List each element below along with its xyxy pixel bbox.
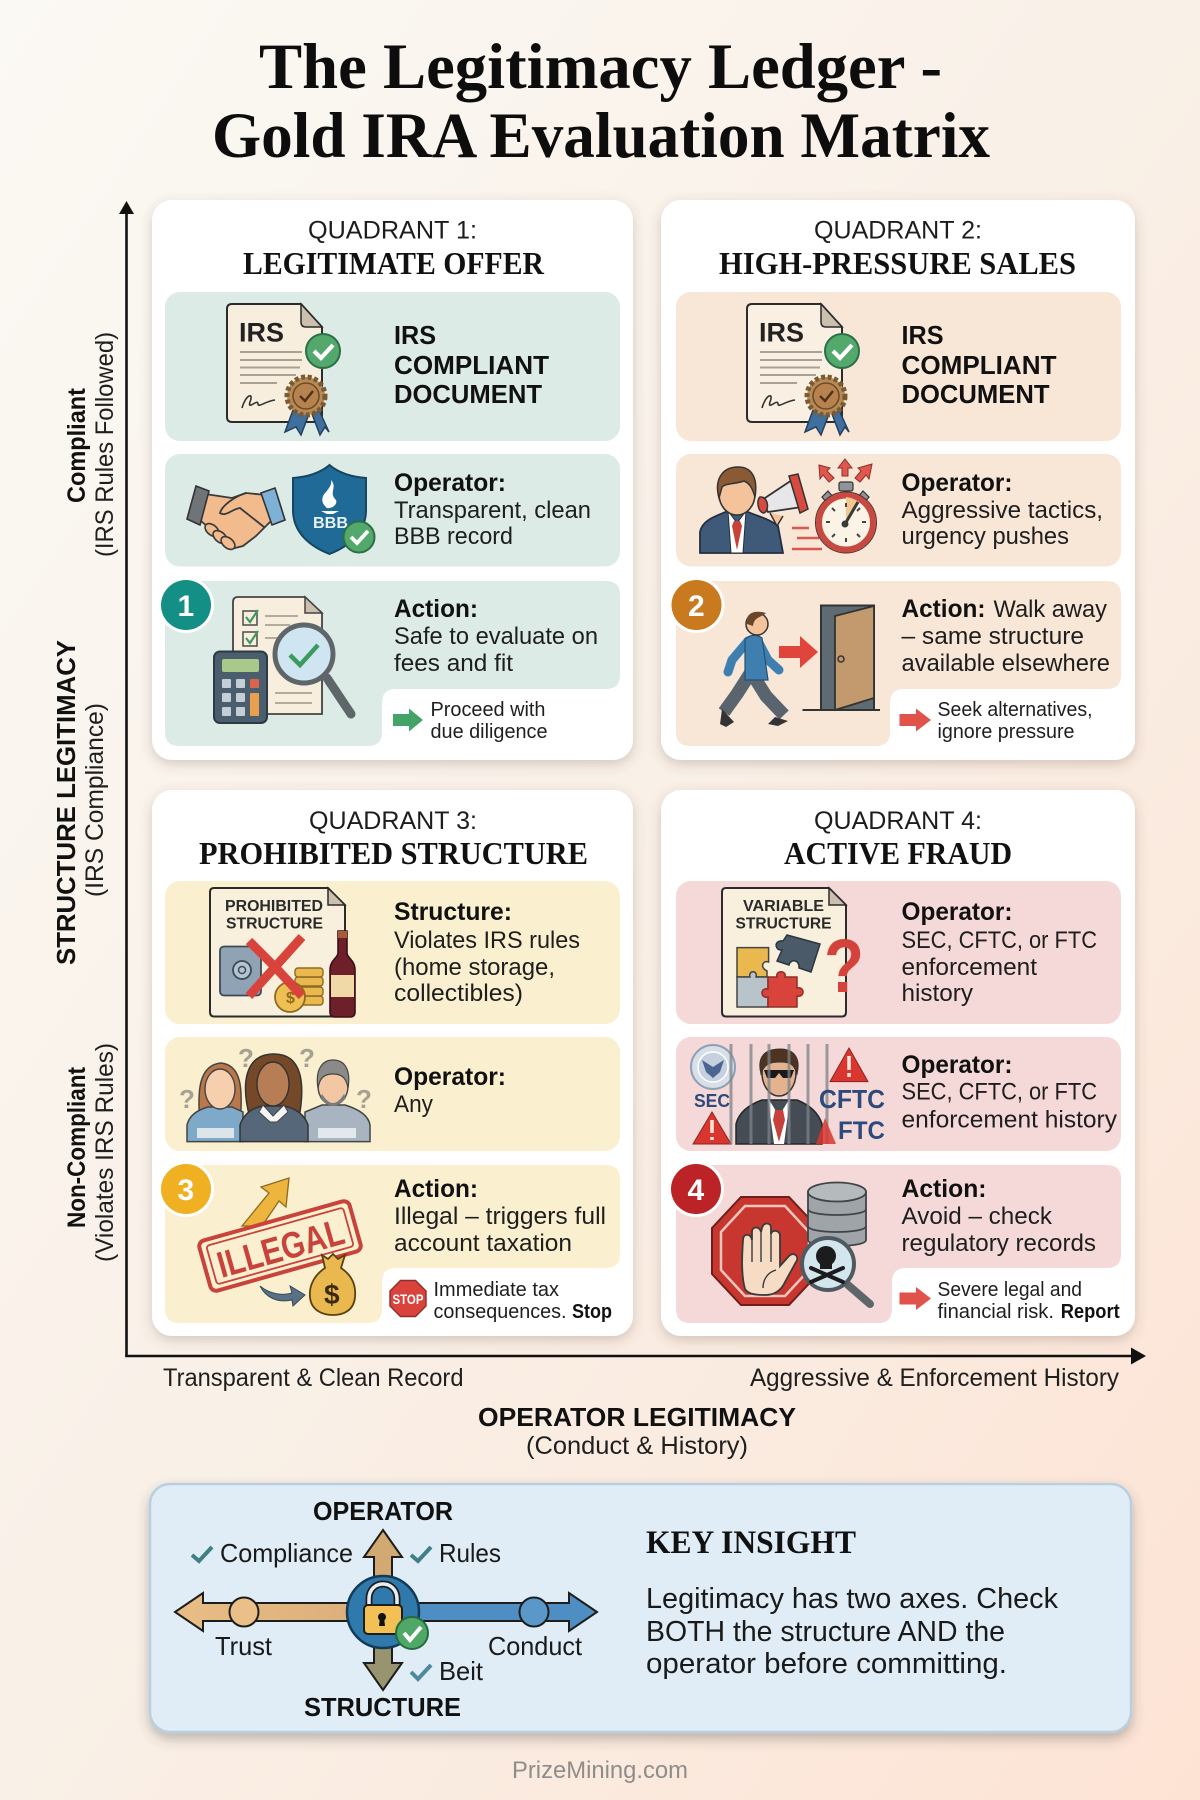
badge: 2: 2 <box>688 590 705 623</box>
left arrow <box>175 1593 350 1631</box>
icon: green arrow <box>393 708 423 732</box>
icon: prohibited structure document <box>210 888 355 1017</box>
action text <box>902 595 1110 677</box>
operator text: SEC, CFTC, or FTC <box>902 927 1097 954</box>
icon: illegal stamp, rising arrow and money bag: $ <box>324 1279 340 1310</box>
action text: – same structure <box>902 623 1084 650</box>
badge: 3 <box>158 1161 214 1217</box>
callout: severe legal and financial risk: Severe legal and <box>938 1279 1082 1301</box>
icon: warning triangle left <box>693 1112 731 1144</box>
operator text <box>394 1063 506 1118</box>
icon: stop sign <box>390 1280 426 1316</box>
operator text <box>394 469 591 550</box>
label: rules <box>411 1538 501 1568</box>
action text: Avoid – check <box>902 1203 1053 1230</box>
panel: quadrant 3 prohibited structure <box>152 790 633 1336</box>
row: action <box>676 1165 1121 1323</box>
action text: Illegal – triggers full <box>394 1203 606 1230</box>
row: operator <box>676 454 1121 566</box>
label: conduct: Conduct <box>488 1631 583 1661</box>
label: irs compliant document: IRS <box>902 320 944 350</box>
vertical axis arrow: structure legitimacy <box>119 201 134 1356</box>
operator text: history <box>902 980 973 1007</box>
icon: variable structure puzzle document: ? <box>824 924 864 1009</box>
y axis label: non-compliant: (Violates IRS Rules) <box>91 1043 119 1262</box>
icon: checklist, calculator and magnifier <box>214 597 351 723</box>
diagram: two axes with lock <box>175 1496 597 1722</box>
operator label: OPERATOR <box>313 1496 453 1526</box>
callout: proceed with due diligence: due diligence <box>430 721 548 743</box>
icon: three people with question marks: ? <box>238 1043 254 1073</box>
row: operator <box>165 454 620 566</box>
callout: seek alternatives <box>938 699 1092 743</box>
x axis endpoint labels <box>163 1364 1119 1392</box>
operator text: BBB record <box>394 523 513 550</box>
action text: Safe to evaluate on <box>394 623 598 650</box>
node: trust <box>230 1598 258 1626</box>
callout: immediate tax consequences: Stop <box>572 1301 612 1323</box>
y axis label: compliant: Compliant <box>63 387 91 503</box>
operator text <box>902 469 1103 550</box>
row: action <box>165 1165 620 1323</box>
icon: red arrow <box>900 1287 931 1310</box>
badge: 3: 3 <box>178 1174 194 1207</box>
action text: fees and fit <box>394 650 513 677</box>
icon: cftc and ftc labels: FTC <box>838 1117 885 1145</box>
key insight text: operator before committing. <box>646 1648 1007 1680</box>
icon: executive behind bars <box>731 1044 827 1144</box>
callout: immediate tax consequences: consequences. <box>434 1301 566 1323</box>
callout: immediate tax consequences: Immediate tax <box>434 1279 559 1301</box>
action text: regulatory records <box>902 1230 1096 1257</box>
icon: illegal stamp, rising arrow and money bag <box>198 1178 362 1315</box>
callout: severe legal and financial risk: Report <box>1061 1301 1120 1323</box>
structure text: Structure: <box>394 898 512 926</box>
icon: irs compliant document: IRS <box>239 318 284 348</box>
operator text: enforcement history <box>902 1106 1117 1134</box>
label: compliance: Compliance <box>220 1538 353 1568</box>
operator text: Operator: <box>394 469 506 497</box>
quadrant 3 heading <box>199 807 588 871</box>
icon: sec seal <box>691 1045 735 1111</box>
quadrant 3 heading: QUADRANT 3: <box>309 807 477 835</box>
action text: Action: <box>902 1175 986 1203</box>
quadrant 4 heading <box>784 807 1012 871</box>
structure text: collectibles) <box>394 980 523 1007</box>
icon: irs compliant document <box>227 304 340 435</box>
label: rules: Rules <box>439 1538 501 1568</box>
quadrant 1 heading: LEGITIMATE OFFER <box>243 245 545 281</box>
panel: quadrant 1 legitimate offer <box>152 200 633 760</box>
x axis title: operator legitimacy <box>478 1402 796 1460</box>
badge: 2 <box>668 577 724 633</box>
quadrant 3 heading: PROHIBITED STRUCTURE <box>199 835 588 871</box>
callout: severe legal and financial risk <box>938 1279 1120 1323</box>
icon: variable structure puzzle document: VARIABLE <box>743 898 824 915</box>
icon: check badge <box>396 1617 428 1649</box>
key insight text: Legitimacy has two axes. Check <box>646 1583 1058 1615</box>
row: action <box>676 581 1121 746</box>
icon: stopwatch with urgency arrows <box>792 459 876 553</box>
y axis label: non-compliant: Non-Compliant <box>63 1066 91 1228</box>
row: irs document <box>676 292 1121 441</box>
row: structure <box>676 881 1121 1024</box>
callout: proceed with due diligence: Proceed with <box>430 699 546 721</box>
badge: 1 <box>158 577 214 633</box>
badge: 4 <box>668 1161 724 1217</box>
down arrow <box>364 1640 402 1690</box>
icon: three people with question marks <box>179 1043 372 1142</box>
node: conduct <box>520 1598 548 1626</box>
row: operator <box>676 1037 1121 1151</box>
operator text: SEC, CFTC, or FTC <box>902 1078 1097 1106</box>
icon: bbb shield: BBB <box>313 515 348 532</box>
quadrant 2 heading: HIGH-PRESSURE SALES <box>719 245 1076 281</box>
label: beit: Beit <box>439 1656 484 1686</box>
quadrant 4 heading: ACTIVE FRAUD <box>784 835 1012 871</box>
icon: handshake <box>187 486 285 552</box>
operator text: Operator: <box>394 1063 506 1091</box>
row: irs document <box>165 292 620 441</box>
icon: prohibited structure document: $ <box>286 990 295 1007</box>
label: beit <box>411 1656 484 1686</box>
title: Gold IRA Evaluation Matrix <box>212 100 990 172</box>
quadrant 1 heading: QUADRANT 1: <box>308 216 477 244</box>
callout: proceed with due diligence <box>430 699 548 743</box>
structure text: (home storage, <box>394 954 555 981</box>
panel: key insight <box>150 1484 1131 1732</box>
structure text <box>394 898 580 1007</box>
action text: Walk away <box>994 596 1107 623</box>
action text: Action: <box>902 595 986 623</box>
action text: Action: <box>394 595 478 623</box>
label: irs compliant document: COMPLIANT <box>394 350 549 380</box>
operator text: urgency pushes <box>902 523 1069 550</box>
action text <box>902 1175 1096 1257</box>
icon: irs compliant document <box>747 304 859 435</box>
icon: variable structure puzzle document <box>722 888 864 1016</box>
icon: salesman with megaphone <box>700 467 808 553</box>
icon: prohibited structure document: PROHIBITED <box>225 898 323 915</box>
label: irs compliant document: IRS <box>394 320 436 350</box>
icon: warning triangle right <box>830 1048 868 1082</box>
icon: three people with question marks: ? <box>179 1084 195 1114</box>
icon: irs compliant document: IRS <box>759 318 804 348</box>
icon: three people with question marks: ? <box>356 1084 372 1114</box>
title <box>212 31 990 172</box>
action text: account taxation <box>394 1230 572 1257</box>
row: operator <box>165 1037 620 1151</box>
key insight heading: KEY INSIGHT <box>646 1525 856 1561</box>
label: irs compliant document: DOCUMENT <box>902 379 1050 409</box>
label: irs compliant document: COMPLIANT <box>902 350 1057 380</box>
operator text <box>902 898 1097 1007</box>
structure label: STRUCTURE <box>304 1692 461 1722</box>
quadrant 2 heading <box>719 216 1076 281</box>
horizontal axis arrow: operator legitimacy <box>125 1348 1146 1364</box>
quadrant 2 heading: QUADRANT 2: <box>814 216 982 244</box>
operator text: Any <box>394 1091 433 1118</box>
action text: available elsewhere <box>902 650 1110 677</box>
action text <box>394 595 598 677</box>
operator text <box>902 1051 1117 1134</box>
callout: severe legal and financial risk: financial risk. <box>938 1301 1054 1323</box>
x axis title: operator legitimacy: OPERATOR LEGITIMACY <box>478 1402 796 1432</box>
x axis title: operator legitimacy: (Conduct & History) <box>526 1432 748 1460</box>
icon: variable structure puzzle document: STRUCTURE <box>736 916 832 932</box>
panel: quadrant 4 active fraud <box>661 790 1135 1336</box>
icon: sec seal: SEC <box>694 1091 730 1111</box>
icon: bbb shield <box>293 465 374 554</box>
y axis title: structure legitimacy: STRUCTURE LEGITIMACY <box>51 640 81 965</box>
icon: stop hand, database and skull magnifier <box>712 1182 870 1305</box>
badge: 4: 4 <box>688 1174 704 1207</box>
icon: person walking away through door <box>720 606 880 727</box>
icon: stop sign: STOP <box>392 1291 424 1307</box>
icon: cftc and ftc labels <box>816 1084 885 1145</box>
y axis label: compliant: (IRS Rules Followed) <box>91 332 119 557</box>
title: The Legitimacy Ledger - <box>259 31 942 103</box>
panel: quadrant 2 high-pressure sales <box>661 200 1135 760</box>
operator text: Transparent, clean <box>394 497 591 524</box>
y axis title: structure legitimacy: (IRS Compliance) <box>81 703 109 897</box>
key insight text: BOTH the structure AND the <box>646 1616 1005 1648</box>
footer: source: PrizeMining.com <box>512 1757 688 1784</box>
x axis endpoint labels: Transparent & Clean Record <box>163 1364 464 1392</box>
action text: Action: <box>394 1175 478 1203</box>
key insight text <box>646 1583 1058 1680</box>
up arrow <box>364 1530 402 1590</box>
row: action <box>165 581 620 746</box>
quadrant 4 heading: QUADRANT 4: <box>814 807 982 835</box>
quadrant 1 heading <box>243 216 545 281</box>
label: irs compliant document: DOCUMENT <box>394 379 542 409</box>
operator text: Operator: <box>902 469 1012 497</box>
y axis label: non-compliant <box>63 1043 119 1262</box>
operator text: Aggressive tactics, <box>902 497 1103 524</box>
label: trust: Trust <box>215 1631 273 1661</box>
icon: padlock in circle <box>347 1576 419 1648</box>
structure text: Violates IRS rules <box>394 927 580 954</box>
y axis label: compliant <box>63 332 119 557</box>
icon: prohibited structure document: STRUCTURE <box>226 916 323 932</box>
operator text: Operator: <box>902 1051 1012 1079</box>
callout: seek alternatives: ignore pressure <box>938 721 1074 743</box>
x axis endpoint labels: Aggressive & Enforcement History <box>750 1364 1119 1392</box>
icon: illegal stamp, rising arrow and money bag: ILLEGAL <box>213 1211 349 1286</box>
row: structure <box>165 881 620 1024</box>
label: irs compliant document <box>394 320 549 409</box>
operator text: enforcement <box>902 954 1037 981</box>
y axis title: structure legitimacy <box>51 640 109 965</box>
icon: three people with question marks: ? <box>299 1043 315 1073</box>
callout: immediate tax consequences <box>434 1279 612 1323</box>
action text <box>394 1175 606 1257</box>
badge: 1: 1 <box>178 590 194 623</box>
operator text: Operator: <box>902 898 1012 926</box>
right arrow <box>415 1593 597 1631</box>
label: irs compliant document <box>902 320 1057 409</box>
icon: red arrow <box>900 708 931 732</box>
icon: cftc and ftc labels: CFTC <box>819 1084 885 1114</box>
callout: seek alternatives: Seek alternatives, <box>938 699 1092 721</box>
